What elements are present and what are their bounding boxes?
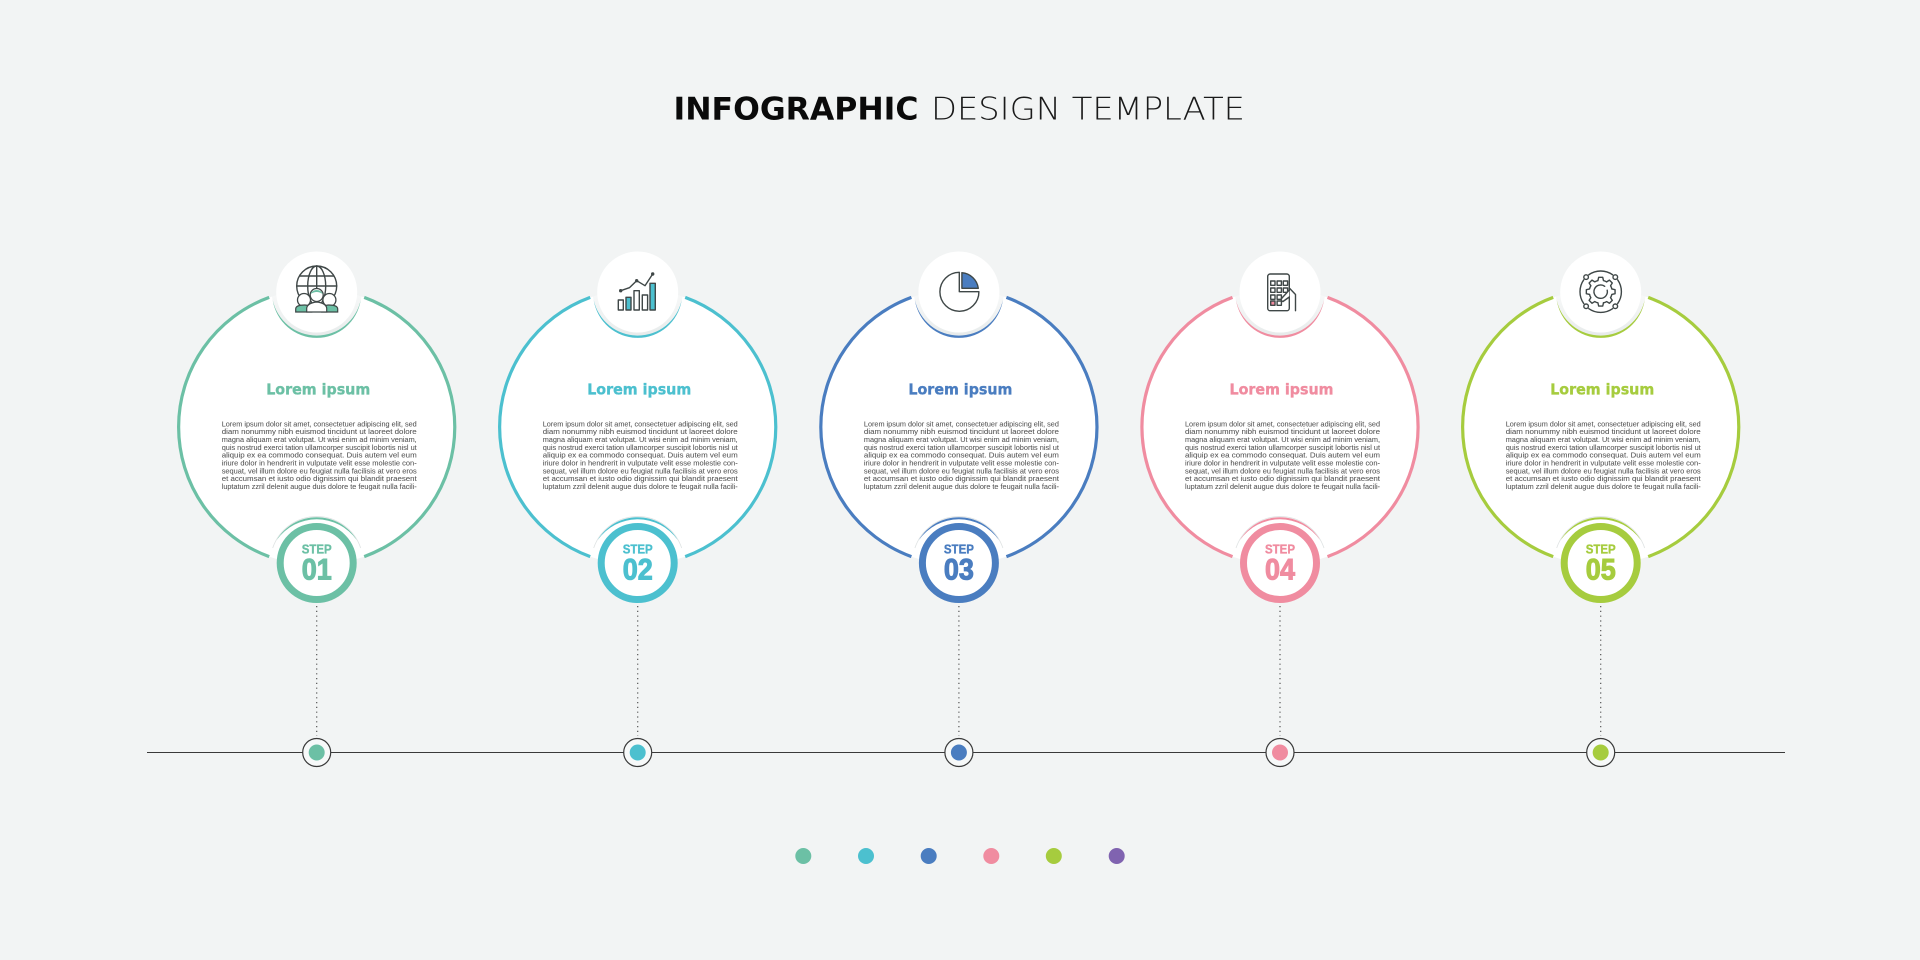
text block: aliquip ex ea commodo consequat. Duis autem vel eum bbox=[543, 451, 738, 460]
text block: quis nostrud exerci tation ullamcorper suscipit lobortis nisl ut bbox=[222, 443, 418, 452]
step badge bbox=[915, 517, 1003, 600]
text block: diam nonummy nibh euismod tincidunt ut laoreet dolore bbox=[864, 427, 1059, 436]
heading: Lorem ipsum bbox=[1550, 380, 1654, 398]
text block: quis nostrud exerci tation ullamcorper suscipit lobortis nisl ut bbox=[864, 443, 1060, 452]
dotted connector bbox=[1279, 606, 1281, 736]
text block: sequat, vel illum dolore eu feugiat nulla facilisis at vero eros bbox=[864, 466, 1059, 475]
title bbox=[674, 92, 1245, 128]
step badge: STEP bbox=[944, 542, 974, 557]
icon: phone in hand bbox=[1268, 274, 1296, 311]
text block: sequat, vel illum dolore eu feugiat nulla facilisis at vero eros bbox=[222, 466, 417, 475]
timeline node bbox=[945, 738, 973, 766]
text block: quis nostrud exerci tation ullamcorper suscipit lobortis nisl ut bbox=[1506, 443, 1702, 452]
text block: et accumsan et iusto odio dignissim qui blandit praesent bbox=[543, 474, 739, 483]
text block bbox=[222, 419, 418, 491]
text block: luptatum zzril delenit augue duis dolore te feugait nulla facili- bbox=[864, 482, 1059, 491]
step badge bbox=[594, 517, 682, 600]
text block: iriure dolor in hendrerit in vulputate velit esse molestie con- bbox=[1185, 458, 1380, 468]
dotted connector bbox=[1600, 606, 1602, 736]
text block: sequat, vel illum dolore eu feugiat nulla facilisis at vero eros bbox=[543, 466, 738, 475]
text block: luptatum zzril delenit augue duis dolore te feugait nulla facili- bbox=[543, 482, 738, 491]
text block: luptatum zzril delenit augue duis dolore te feugait nulla facili- bbox=[1185, 482, 1380, 491]
icon: globe with people bbox=[296, 266, 338, 312]
text block: iriure dolor in hendrerit in vulputate velit esse molestie con- bbox=[1506, 458, 1701, 468]
text block: diam nonummy nibh euismod tincidunt ut laoreet dolore bbox=[222, 427, 417, 436]
step badge bbox=[273, 517, 361, 600]
text block: aliquip ex ea commodo consequat. Duis autem vel eum bbox=[1506, 451, 1701, 460]
text block: diam nonummy nibh euismod tincidunt ut laoreet dolore bbox=[1185, 427, 1380, 436]
text block: diam nonummy nibh euismod tincidunt ut laoreet dolore bbox=[1506, 427, 1701, 436]
icon: gear with orbit bbox=[1580, 271, 1621, 312]
step badge: 01 bbox=[302, 553, 332, 586]
panel: step 03 bbox=[821, 247, 1097, 766]
timeline node bbox=[1266, 738, 1294, 766]
text block: et accumsan et iusto odio dignissim qui blandit praesent bbox=[864, 474, 1060, 483]
timeline axis bbox=[147, 752, 1785, 754]
text block: magna aliquam erat volutpat. Ut wisi enim ad minim veniam, bbox=[864, 435, 1059, 444]
text block: iriure dolor in hendrerit in vulputate velit esse molestie con- bbox=[222, 458, 417, 468]
text block: quis nostrud exerci tation ullamcorper suscipit lobortis nisl ut bbox=[543, 443, 739, 452]
text block: aliquip ex ea commodo consequat. Duis autem vel eum bbox=[1185, 451, 1380, 460]
text block: aliquip ex ea commodo consequat. Duis autem vel eum bbox=[222, 451, 417, 460]
legend dots bbox=[795, 848, 1125, 864]
step badge: STEP bbox=[1265, 542, 1295, 557]
text block: quis nostrud exerci tation ullamcorper suscipit lobortis nisl ut bbox=[1185, 443, 1381, 452]
dotted connector bbox=[958, 606, 960, 736]
step badge: STEP bbox=[1586, 542, 1616, 557]
text block: Lorem ipsum dolor sit amet, consectetuer adipiscing elit, sed bbox=[222, 419, 417, 428]
icon: bar chart bbox=[618, 273, 655, 310]
step badge bbox=[1236, 517, 1324, 600]
text block: sequat, vel illum dolore eu feugiat nulla facilisis at vero eros bbox=[1506, 466, 1701, 475]
text block: sequat, vel illum dolore eu feugiat nulla facilisis at vero eros bbox=[1185, 466, 1380, 475]
text block: et accumsan et iusto odio dignissim qui blandit praesent bbox=[1185, 474, 1381, 483]
panel: step 04 bbox=[1142, 247, 1418, 766]
heading: Lorem ipsum bbox=[908, 380, 1012, 398]
title: INFOGRAPHIC bbox=[674, 92, 918, 128]
panel: step 02 bbox=[500, 247, 776, 766]
text block: Lorem ipsum dolor sit amet, consectetuer adipiscing elit, sed bbox=[1506, 419, 1701, 428]
step badge: 03 bbox=[944, 553, 974, 586]
timeline node bbox=[303, 738, 331, 766]
text block: magna aliquam erat volutpat. Ut wisi enim ad minim veniam, bbox=[1506, 435, 1701, 444]
dotted connector bbox=[316, 606, 318, 736]
text block: Lorem ipsum dolor sit amet, consectetuer adipiscing elit, sed bbox=[543, 419, 738, 428]
text block: magna aliquam erat volutpat. Ut wisi enim ad minim veniam, bbox=[222, 435, 417, 444]
step badge bbox=[1557, 517, 1645, 600]
step badge: STEP bbox=[623, 542, 653, 557]
text block: Lorem ipsum dolor sit amet, consectetuer adipiscing elit, sed bbox=[864, 419, 1059, 428]
text block: magna aliquam erat volutpat. Ut wisi enim ad minim veniam, bbox=[543, 435, 738, 444]
text block: aliquip ex ea commodo consequat. Duis autem vel eum bbox=[864, 451, 1059, 460]
text block bbox=[864, 419, 1060, 491]
panel: step 01 bbox=[179, 247, 455, 766]
text block: diam nonummy nibh euismod tincidunt ut laoreet dolore bbox=[543, 427, 738, 436]
title: DESIGN TEMPLATE bbox=[931, 92, 1245, 128]
timeline node bbox=[624, 738, 652, 766]
heading: Lorem ipsum bbox=[1230, 380, 1334, 398]
text block: Lorem ipsum dolor sit amet, consectetuer adipiscing elit, sed bbox=[1185, 419, 1380, 428]
dotted connector bbox=[637, 606, 639, 736]
text block: magna aliquam erat volutpat. Ut wisi enim ad minim veniam, bbox=[1185, 435, 1380, 444]
icon: pie chart bbox=[940, 272, 979, 311]
text block: et accumsan et iusto odio dignissim qui blandit praesent bbox=[1506, 474, 1702, 483]
heading: Lorem ipsum bbox=[587, 380, 691, 398]
text block bbox=[1506, 419, 1702, 491]
step badge: 04 bbox=[1265, 553, 1295, 586]
timeline node bbox=[1587, 738, 1615, 766]
text block bbox=[543, 419, 739, 491]
text block bbox=[1185, 419, 1381, 491]
text block: luptatum zzril delenit augue duis dolore te feugait nulla facili- bbox=[1506, 482, 1701, 491]
text block: luptatum zzril delenit augue duis dolore te feugait nulla facili- bbox=[222, 482, 417, 491]
text block: iriure dolor in hendrerit in vulputate velit esse molestie con- bbox=[864, 458, 1059, 468]
step badge: 05 bbox=[1586, 553, 1616, 586]
text block: et accumsan et iusto odio dignissim qui blandit praesent bbox=[222, 474, 418, 483]
step badge: STEP bbox=[302, 542, 332, 557]
heading: Lorem ipsum bbox=[266, 380, 370, 398]
step badge: 02 bbox=[623, 553, 653, 586]
panel: step 05 bbox=[1463, 247, 1739, 766]
text block: iriure dolor in hendrerit in vulputate velit esse molestie con- bbox=[543, 458, 738, 468]
